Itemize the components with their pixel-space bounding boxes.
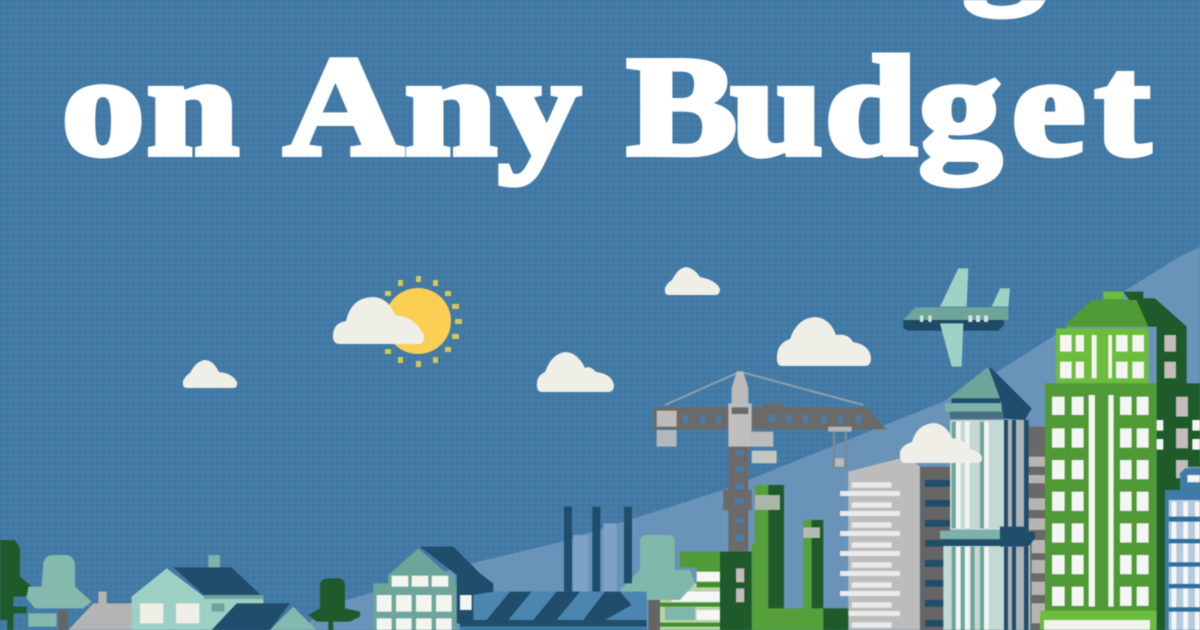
grey house <box>68 592 133 630</box>
light beam behind skyline <box>300 247 1200 630</box>
title: on Any Budget: B <box>627 28 737 185</box>
title: on Any Budget: A <box>284 28 403 185</box>
mid house with teal gable <box>373 547 493 630</box>
left trees and houses <box>0 540 360 630</box>
icon: airplane <box>903 268 1010 367</box>
icon: small cloud left <box>183 360 237 388</box>
icon: cloud in front of towers <box>900 423 982 463</box>
dark tree right <box>308 578 360 630</box>
back grey building <box>1028 427 1047 630</box>
title: on Any Budget: n <box>147 28 239 185</box>
icon: cloud over sun <box>333 297 424 344</box>
green mid-rise building <box>660 552 752 630</box>
grey tower <box>840 457 950 630</box>
icon: large cloud right <box>777 317 871 366</box>
title: on Any Budget: d <box>825 28 917 185</box>
teal tree by factory <box>573 523 695 630</box>
title: on Any Budget: o <box>62 28 144 185</box>
title: on Any Budget: y <box>498 28 580 185</box>
dark tree left <box>0 540 32 630</box>
teal tree <box>58 610 68 630</box>
icon: sun <box>385 276 462 367</box>
icon: small cloud top <box>665 267 720 295</box>
title: on Any Budget: n <box>405 28 497 185</box>
crane <box>653 372 887 553</box>
factory with dark chimneys <box>460 507 647 630</box>
title: on Any Budget: t <box>1095 28 1150 185</box>
factory with green chimneys <box>732 485 848 630</box>
teal tower <box>940 367 1035 630</box>
title: on Any Budget: e <box>1012 28 1085 185</box>
blue building <box>1165 468 1200 630</box>
green tower <box>1040 292 1200 630</box>
title: on Any Budget: g <box>919 28 1001 185</box>
title: on Any Budget: u <box>731 28 823 185</box>
dark roof small house <box>212 603 290 630</box>
pale house <box>132 555 263 630</box>
icon: cloud middle <box>537 352 614 392</box>
